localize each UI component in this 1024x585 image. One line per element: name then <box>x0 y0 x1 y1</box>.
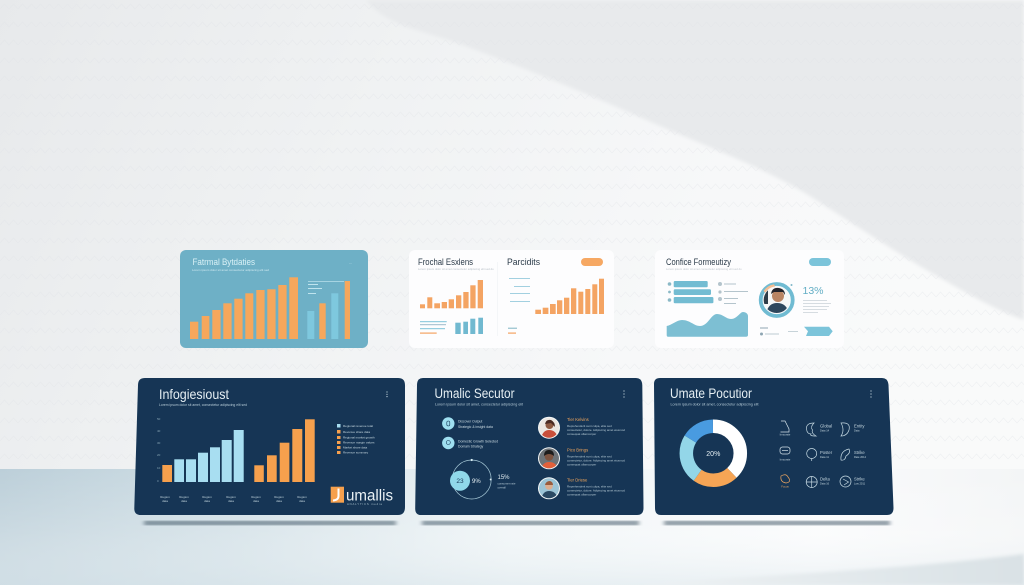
item text 1: Strategic & insight data <box>458 425 493 429</box>
heading: Umalic Secutor <box>434 386 515 401</box>
legend lines: right chart <box>509 278 530 302</box>
legend lines: teal card <box>308 281 344 294</box>
progress ring <box>450 459 492 499</box>
menu dots <box>623 390 625 398</box>
icon captions: middle column: Delta <box>820 476 830 482</box>
menu icon: teal card: ... <box>349 260 352 265</box>
person text 1: consequat ullamcorper <box>567 432 596 436</box>
icon captions: left column: Focus <box>781 484 789 488</box>
avatar 2 <box>538 447 560 469</box>
heading: confidence: Confice Formeutizy <box>666 257 732 267</box>
icon grid: middle column <box>806 423 817 488</box>
heading: Infogiesioust <box>159 386 229 402</box>
item text 2: Domain Strategy <box>458 444 484 448</box>
footer legend <box>760 328 798 336</box>
icon grid: left column <box>780 421 790 483</box>
x-axis labels: Region <box>297 495 307 499</box>
stat: 15% <box>498 475 516 490</box>
icon captions: middle column: Global <box>820 424 832 428</box>
avatar 3 <box>538 477 560 499</box>
person text 1 <box>567 417 625 436</box>
icon captions: left column: Innovate <box>780 432 791 436</box>
avatar 1 <box>538 417 560 439</box>
subtitle: Lorem ipsum dolor sit amet, consectetur adipiscing elit sed <box>159 403 247 407</box>
legend: Revenue margin values <box>343 440 375 444</box>
logo: umallis: ANALYTICS media <box>347 502 383 506</box>
panel: financial white card <box>409 250 614 348</box>
stat description <box>803 300 831 313</box>
progress ring: 9% <box>472 479 481 485</box>
panel: Umate Pocutior dark card <box>654 378 894 515</box>
person text 2: Reprehenderit sunt culpa, elite sed <box>567 454 612 458</box>
icon captions: middle column: Data 16 <box>820 482 830 486</box>
menu dots <box>870 390 872 398</box>
subtitle: Lorem ipsum dolor sit amet, consectetur adipiscing elit <box>435 402 523 406</box>
icon captions: left column: Innovate <box>780 458 791 462</box>
item icon 1 <box>442 417 454 430</box>
icon captions: right column <box>854 424 867 486</box>
x-axis labels: data <box>162 499 168 503</box>
heading: Umate Pocutior <box>670 386 752 401</box>
bar chart: orange series <box>254 419 315 482</box>
logo: umallis <box>331 487 393 506</box>
blue pill button <box>809 258 831 266</box>
icon captions: left column <box>780 432 791 488</box>
stat: 13%: 13% <box>802 285 824 297</box>
item text 2: Domestic Growth Selected <box>458 440 498 444</box>
bar chart: left orange <box>420 280 483 308</box>
donut centre value: 20% <box>706 451 720 458</box>
x-axis labels: Region <box>274 495 284 499</box>
panel: teal bar chart card <box>180 250 368 348</box>
panel: confidence white card <box>655 250 844 348</box>
x-axis labels: Region <box>160 495 170 499</box>
legend lines: bottom right <box>508 328 517 334</box>
bar chart: right orange <box>535 279 604 314</box>
x-axis labels: data <box>204 499 210 503</box>
person text 1: Reprehenderit sunt culpa, elite sed <box>567 424 612 428</box>
person text 3: consectetur, dolore. Adipiscing amet eiusmod <box>567 488 625 492</box>
list items <box>718 282 748 304</box>
arrow tag <box>804 327 833 336</box>
bar chart: left blue <box>455 318 483 334</box>
y-axis labels: 40 <box>157 429 161 433</box>
donut chart <box>686 426 740 480</box>
legend: Revenue share data <box>343 430 370 434</box>
y-axis labels: 10 <box>157 466 161 470</box>
donut with portrait <box>760 284 793 316</box>
x-axis labels: data <box>253 499 259 503</box>
stat: 15%: 15% <box>498 475 510 481</box>
progress ring: 23 <box>456 478 464 485</box>
icon captions: right column: Data <box>854 428 860 432</box>
person text 2 <box>567 448 625 466</box>
x-axis labels: data <box>181 499 187 503</box>
person text 3: consequat ullamcorper <box>567 492 596 496</box>
bar chart: blue series <box>162 430 244 482</box>
heading: left chart: Frochal Esxlens <box>418 257 473 267</box>
icon captions: right column: Strike <box>854 450 865 455</box>
x-axis labels: data <box>276 499 282 503</box>
x-axis labels: data <box>299 499 305 503</box>
icon captions: right column: Rate 2014 <box>854 455 867 459</box>
legend: Market share data <box>343 446 368 450</box>
y-axis labels <box>157 417 161 483</box>
x-axis labels: data <box>228 499 234 503</box>
person text 2: Pico Brings <box>567 448 588 452</box>
menu dots <box>386 391 388 397</box>
item text 2 <box>458 440 498 448</box>
subtitle: left chart: Lorem ipsum dolor sit amet consectetur adipiscing elit sed do <box>418 267 494 271</box>
person text 1: consectetur, dolore. Adipiscing amet eiusmod <box>567 428 625 432</box>
icon captions: middle column: Data 11 <box>820 455 829 459</box>
legend: Regional revenue total <box>343 424 373 428</box>
person text 1: Tier Kelvins <box>567 417 589 422</box>
item text 1 <box>458 420 493 429</box>
icon captions: middle column <box>820 424 833 486</box>
icon captions: right column: Entity <box>854 424 865 428</box>
person text 2: consequat ullamcorper <box>567 462 596 466</box>
person text 2: consectetur, dolore. Adipiscing amet eiusmod <box>567 458 625 462</box>
orange pill button <box>581 258 603 266</box>
stat: 15%: overall <box>498 486 506 490</box>
y-axis labels: 0 <box>157 479 159 483</box>
bar chart: orange bars <box>190 277 298 339</box>
x-axis labels <box>160 495 307 503</box>
item text 1: Discover Output <box>458 420 482 424</box>
progress bar icons <box>668 282 671 302</box>
divider <box>496 262 499 336</box>
legend <box>337 424 375 454</box>
icon captions: right column: Strike <box>854 476 865 482</box>
x-axis labels: Region <box>179 495 189 499</box>
x-axis labels: Region <box>202 495 212 499</box>
subtitle: Lorem ipsum dolor sit amet, consectetur adipiscing elit <box>670 402 758 406</box>
legend: Regional market growth <box>343 436 375 440</box>
person text 3 <box>567 478 625 496</box>
legend lines: left chart <box>420 321 447 334</box>
y-axis labels: 50 <box>157 417 161 421</box>
stat: 15%: consumer rate <box>498 482 516 486</box>
icon captions: middle column: Data 14 <box>820 428 830 432</box>
subtitle: teal card: Lorem ipsum dolor sit amet consectetur adipiscing elit sed <box>192 268 269 272</box>
bar chart: mixed bars <box>307 281 350 339</box>
heading: teal card: Fatrmal Bytdaties <box>192 257 255 268</box>
x-axis labels: Region <box>251 495 261 499</box>
floor <box>0 469 1024 585</box>
icon grid: right column <box>840 423 851 487</box>
person text 3: Tier Driese <box>567 478 588 482</box>
subtitle: confidence: Lorem ipsum dolor sit amet consectetur adipiscing elit sed do <box>666 267 742 271</box>
y-axis labels: 20 <box>157 453 161 457</box>
legend: Revenue summary <box>343 450 369 454</box>
panel: Umalic Secutor dark card <box>415 378 644 515</box>
icon captions: right column: Low 2011 <box>854 482 866 486</box>
y-axis labels: 30 <box>157 441 161 445</box>
heading: right chart: Parcidits <box>507 257 540 267</box>
shadow: dark cards <box>144 521 890 525</box>
area chart <box>667 312 748 337</box>
progress bars <box>674 281 713 303</box>
item icon 2 <box>442 437 454 449</box>
logo: umallis: umallis <box>346 488 393 504</box>
person text 3: Reprehenderit sunt culpa, elite sed <box>567 484 612 488</box>
icon captions: middle column: Poster <box>820 450 833 455</box>
panel: Infogiesioust dark card <box>134 378 405 515</box>
x-axis labels: Region <box>226 495 236 499</box>
